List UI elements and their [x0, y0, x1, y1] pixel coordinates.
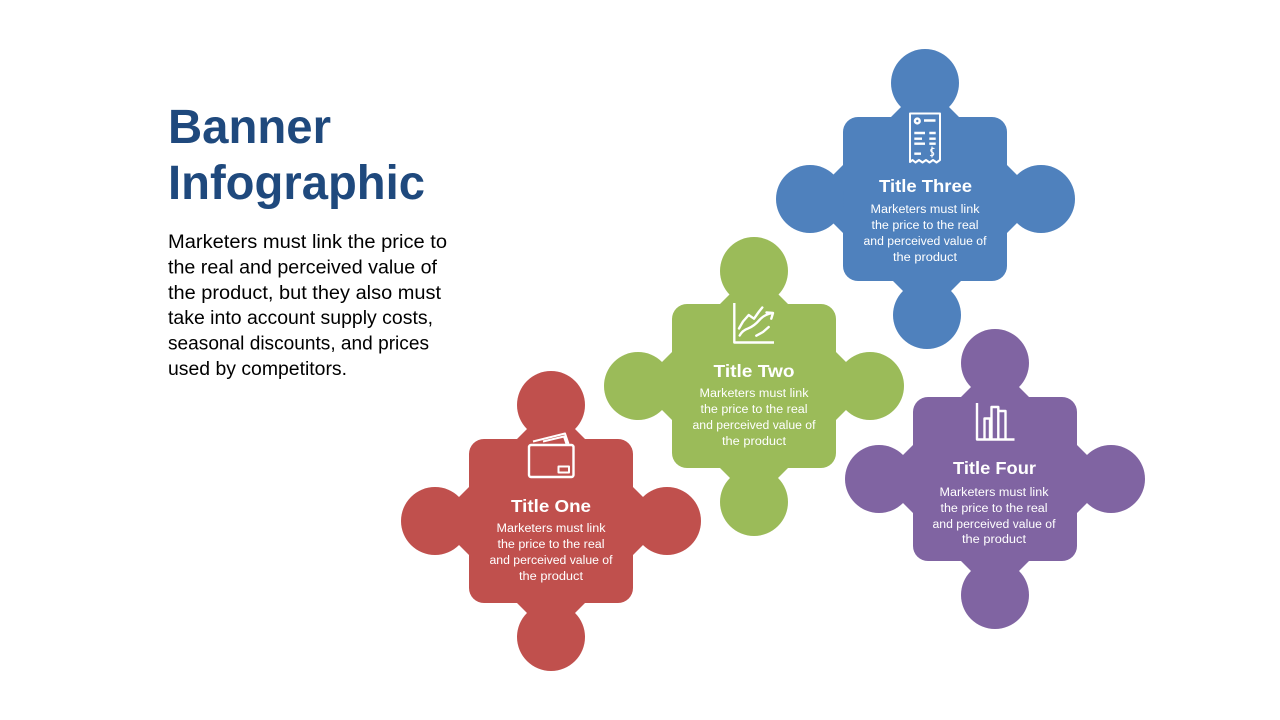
heading: title two: Title Two — [714, 361, 794, 381]
title: Infographic — [168, 157, 425, 210]
body text: title four: the product — [962, 534, 1027, 546]
body text: title two: Marketers must link — [700, 388, 809, 400]
body text: title two: the product — [722, 436, 787, 448]
green puzzle shape — [604, 237, 904, 536]
body text: title three: the price to the real — [872, 220, 978, 232]
body text: title one — [490, 523, 613, 583]
body text: title two — [692, 388, 816, 448]
intro text block: the real and perceived value of — [168, 258, 438, 278]
body text: title four: the price to the real — [940, 503, 1048, 515]
icon: receipt — [910, 114, 940, 162]
heading: title four: Title Four — [953, 458, 1036, 478]
title: Banner — [168, 101, 331, 154]
icon: wallet — [529, 434, 574, 477]
icon: line chart — [734, 303, 774, 342]
purple puzzle shape — [845, 329, 1145, 629]
body text: title four: and perceived value of — [932, 519, 1056, 531]
panel: title one (red) — [401, 371, 701, 671]
body text: title three — [864, 204, 987, 264]
blue puzzle shape — [776, 49, 1075, 349]
body text: title two: the price to the real — [700, 404, 808, 416]
icon: bar chart — [977, 403, 1014, 440]
intro text block — [168, 232, 447, 380]
body text: title three: Marketers must link — [870, 204, 980, 216]
body text: title one: the price to the real — [498, 539, 604, 551]
body text: title three: the product — [893, 252, 958, 264]
heading: title three: Title Three — [879, 176, 972, 196]
panel: title two (green) — [604, 237, 904, 536]
body text: title one: Marketers must link — [496, 523, 606, 535]
body text: title one: and perceived value of — [490, 555, 613, 567]
red puzzle shape — [401, 371, 701, 671]
body text: title one: the product — [519, 571, 584, 583]
panel: title three (blue) — [776, 49, 1075, 349]
body text: title four: Marketers must link — [940, 487, 1049, 499]
title — [168, 101, 425, 210]
body text: title three: and perceived value of — [864, 236, 987, 248]
body text: title four — [932, 487, 1056, 546]
intro text block: take into account supply costs, — [168, 308, 433, 329]
panel: title four (purple) — [845, 329, 1145, 629]
intro text block: the product, but they also must — [168, 283, 442, 304]
heading: title one: Title One — [511, 496, 591, 516]
intro text block: seasonal discounts, and prices — [168, 334, 429, 354]
intro text block: Marketers must link the price to — [168, 232, 447, 253]
intro text block: used by competitors. — [168, 359, 347, 380]
body text: title two: and perceived value of — [692, 420, 816, 432]
